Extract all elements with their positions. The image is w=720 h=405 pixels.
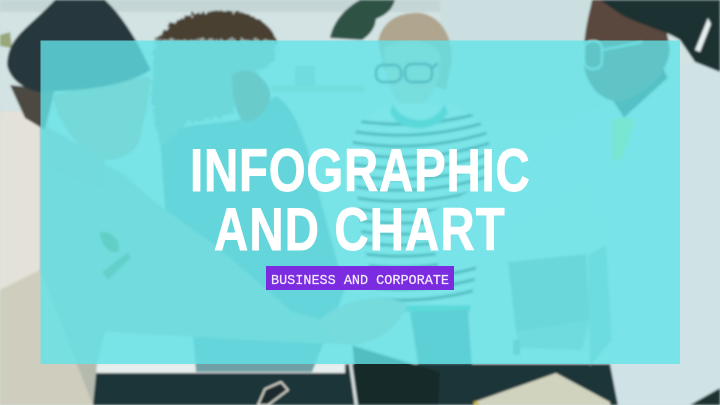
notebook: [474, 373, 610, 405]
left man neck shadow: [45, 125, 105, 190]
left man hair: [10, 85, 55, 130]
right man face: [584, 0, 670, 101]
floor strip: [93, 364, 353, 373]
title: INFOGRAPHIC: [190, 138, 530, 204]
right man eyewear: [584, 41, 642, 69]
table: [93, 364, 620, 405]
striped sweater: [352, 104, 490, 313]
phone: [258, 382, 288, 405]
jeans: [410, 310, 472, 364]
right man shirt: [425, 52, 720, 405]
translucent teal panel: [40, 40, 680, 364]
sofa: [508, 254, 590, 332]
stacked hands: [318, 298, 408, 345]
collar: [390, 104, 448, 128]
title: [190, 138, 530, 263]
dreadlocks: [600, 0, 720, 72]
corner trousers: [690, 388, 720, 405]
blonde woman hair: [378, 13, 452, 90]
glasses: [376, 63, 438, 82]
left man beanie: [7, 0, 151, 92]
left man face: [52, 76, 150, 160]
right man open shirt gap: [588, 245, 612, 366]
woman hair: [152, 11, 277, 145]
laptop: [352, 345, 440, 405]
plant: [330, 0, 395, 40]
subtitle badge: [266, 266, 454, 290]
title: AND CHART: [214, 197, 505, 263]
right man neck: [612, 60, 668, 118]
subtitle badge: BUSINESS AND CORPORATE: [271, 274, 449, 289]
woman sweater: [160, 96, 345, 372]
woman face: [232, 70, 270, 122]
blonde woman face: [384, 41, 440, 110]
left man jacket: [0, 110, 360, 405]
